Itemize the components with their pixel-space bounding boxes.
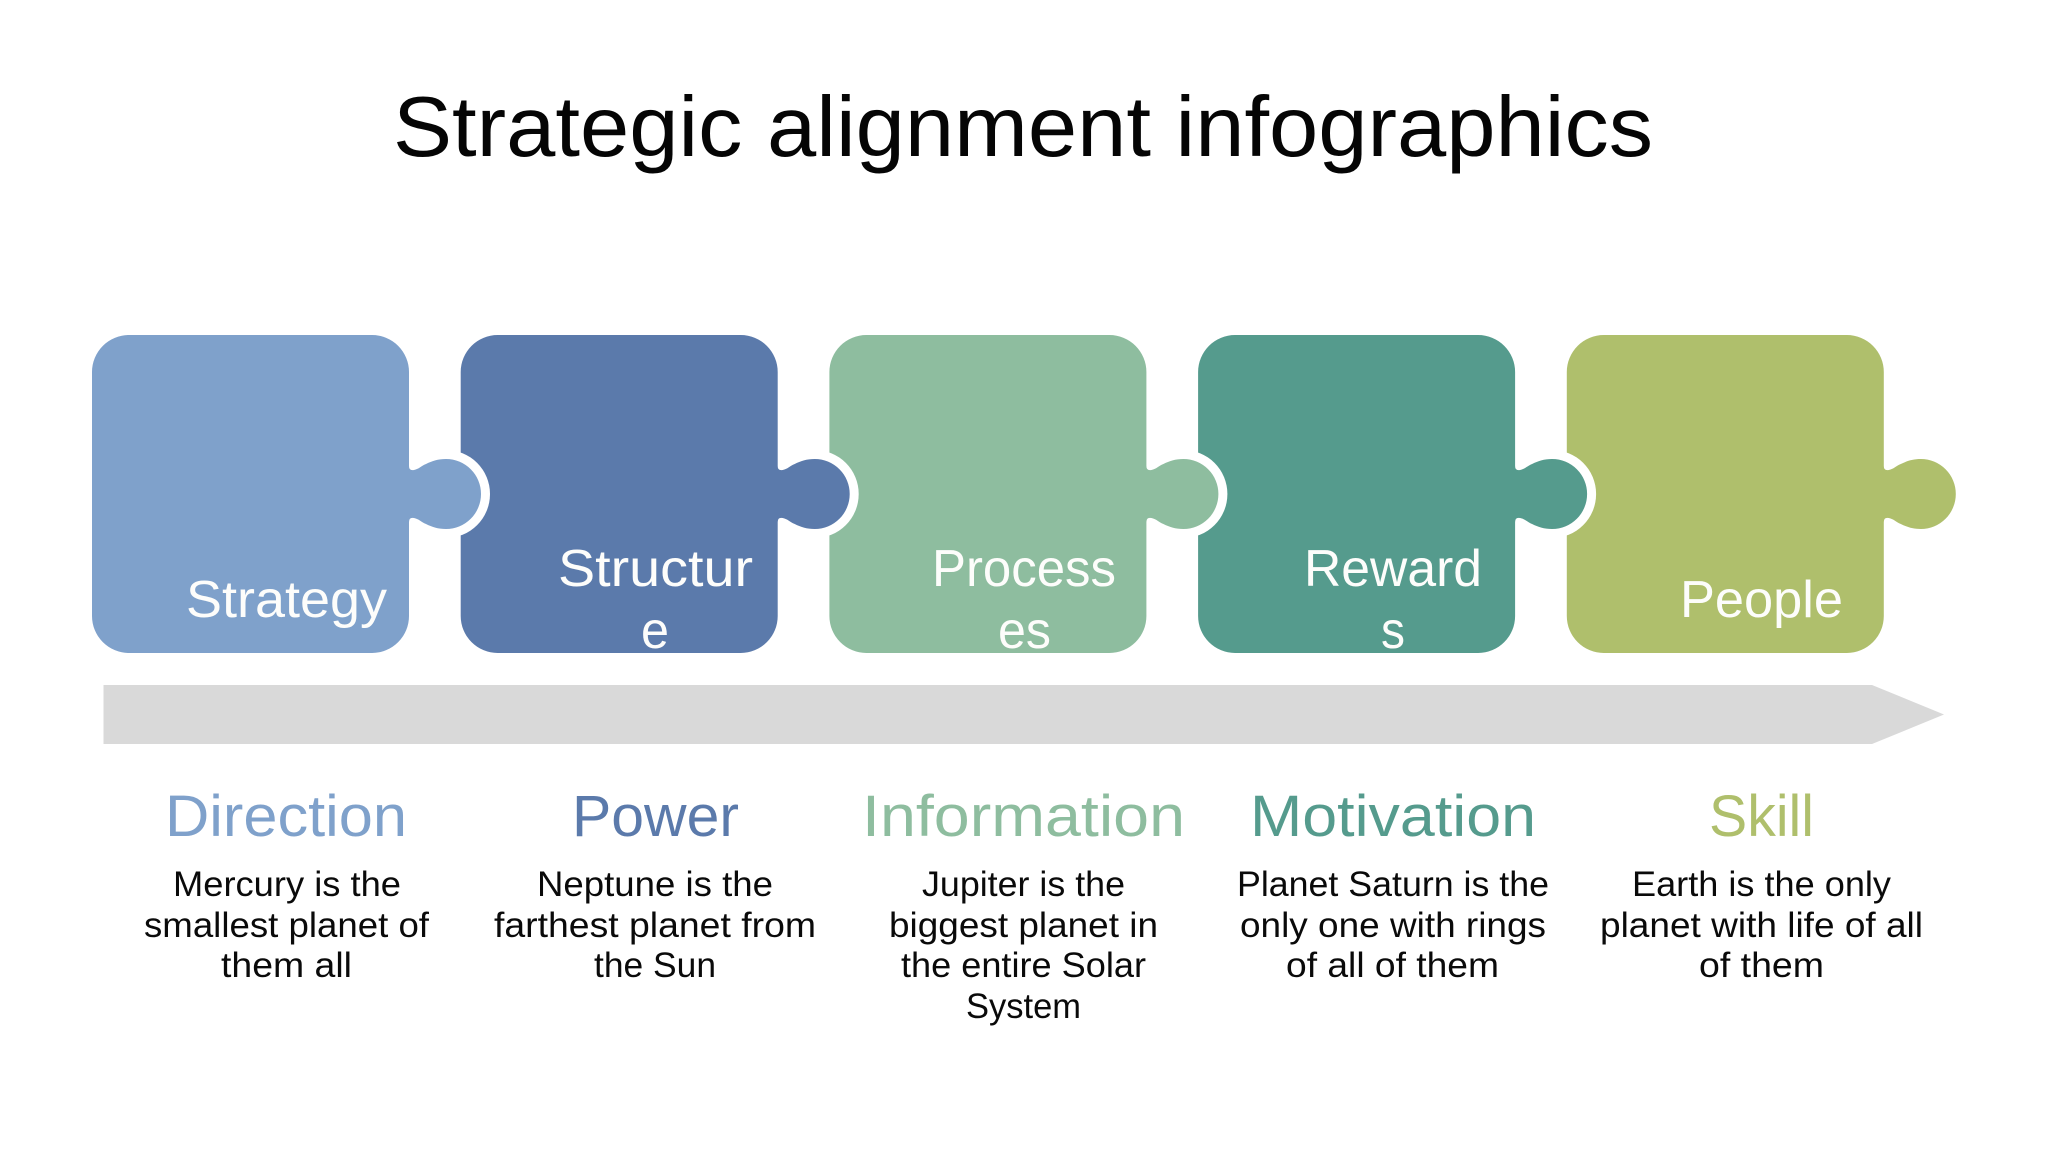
column: Power — [494, 784, 816, 985]
heading: Motivation: Motivation — [1250, 784, 1536, 849]
arrow: timeline — [104, 685, 1944, 744]
text: Saturn description: of all of them — [1286, 946, 1499, 985]
heading: Power: Power — [572, 784, 739, 849]
label: Structure — [558, 540, 753, 660]
text: Saturn description — [1237, 865, 1549, 985]
text: Jupiter description: Jupiter is the — [922, 865, 1125, 904]
text: Saturn description: only one with rings — [1240, 906, 1546, 945]
text: Earth description: of them — [1699, 946, 1824, 985]
text: Neptune description: Neptune is the — [537, 865, 773, 904]
column: Information — [862, 784, 1185, 1026]
heading: Direction: Direction — [165, 784, 407, 849]
puzzle piece: Processes — [829, 335, 1227, 660]
text: Mercury description: Mercury is the — [173, 865, 401, 904]
label: Rewards: Reward — [1304, 540, 1482, 598]
puzzle piece: People — [1567, 335, 1956, 653]
label: Structure: Structur — [558, 540, 753, 598]
text: Saturn description: Planet Saturn is the — [1237, 865, 1549, 904]
puzzle piece: Rewards — [1198, 335, 1596, 660]
text: Earth description: planet with life of all — [1600, 906, 1923, 945]
label: Processes: es — [998, 602, 1051, 660]
text: Jupiter description: biggest planet in — [889, 906, 1158, 945]
text: Neptune description — [494, 865, 816, 985]
column: Motivation — [1237, 784, 1549, 985]
text: Jupiter description — [889, 865, 1158, 1026]
text: Mercury description: them all — [221, 946, 352, 985]
text: Earth description — [1600, 865, 1923, 985]
label: People: People — [1680, 571, 1843, 629]
text: Neptune description: the Sun — [594, 946, 716, 985]
text: Mercury description — [144, 865, 429, 985]
text: Jupiter description: the entire Solar — [901, 946, 1146, 985]
heading: Skill: Skill — [1709, 784, 1814, 849]
column: Skill — [1600, 784, 1923, 985]
label: Processes: Process — [932, 540, 1116, 598]
puzzle piece: Structure — [461, 335, 859, 660]
label: Rewards: s — [1381, 602, 1405, 660]
text: Earth description: Earth is the only — [1632, 865, 1892, 904]
label: Rewards — [1304, 540, 1482, 660]
label: Strategy: Strategy — [186, 571, 387, 629]
title: Strategic alignment infographics — [393, 80, 1653, 175]
puzzle piece: Strategy — [92, 335, 490, 653]
label: Processes — [932, 540, 1116, 660]
heading: Information: Information — [862, 784, 1185, 849]
text: Neptune description: farthest planet from — [494, 906, 816, 945]
column: Direction — [144, 784, 429, 985]
text: Mercury description: smallest planet of — [144, 906, 429, 945]
text: Jupiter description: System — [966, 987, 1081, 1026]
label: Structure: e — [641, 602, 669, 660]
